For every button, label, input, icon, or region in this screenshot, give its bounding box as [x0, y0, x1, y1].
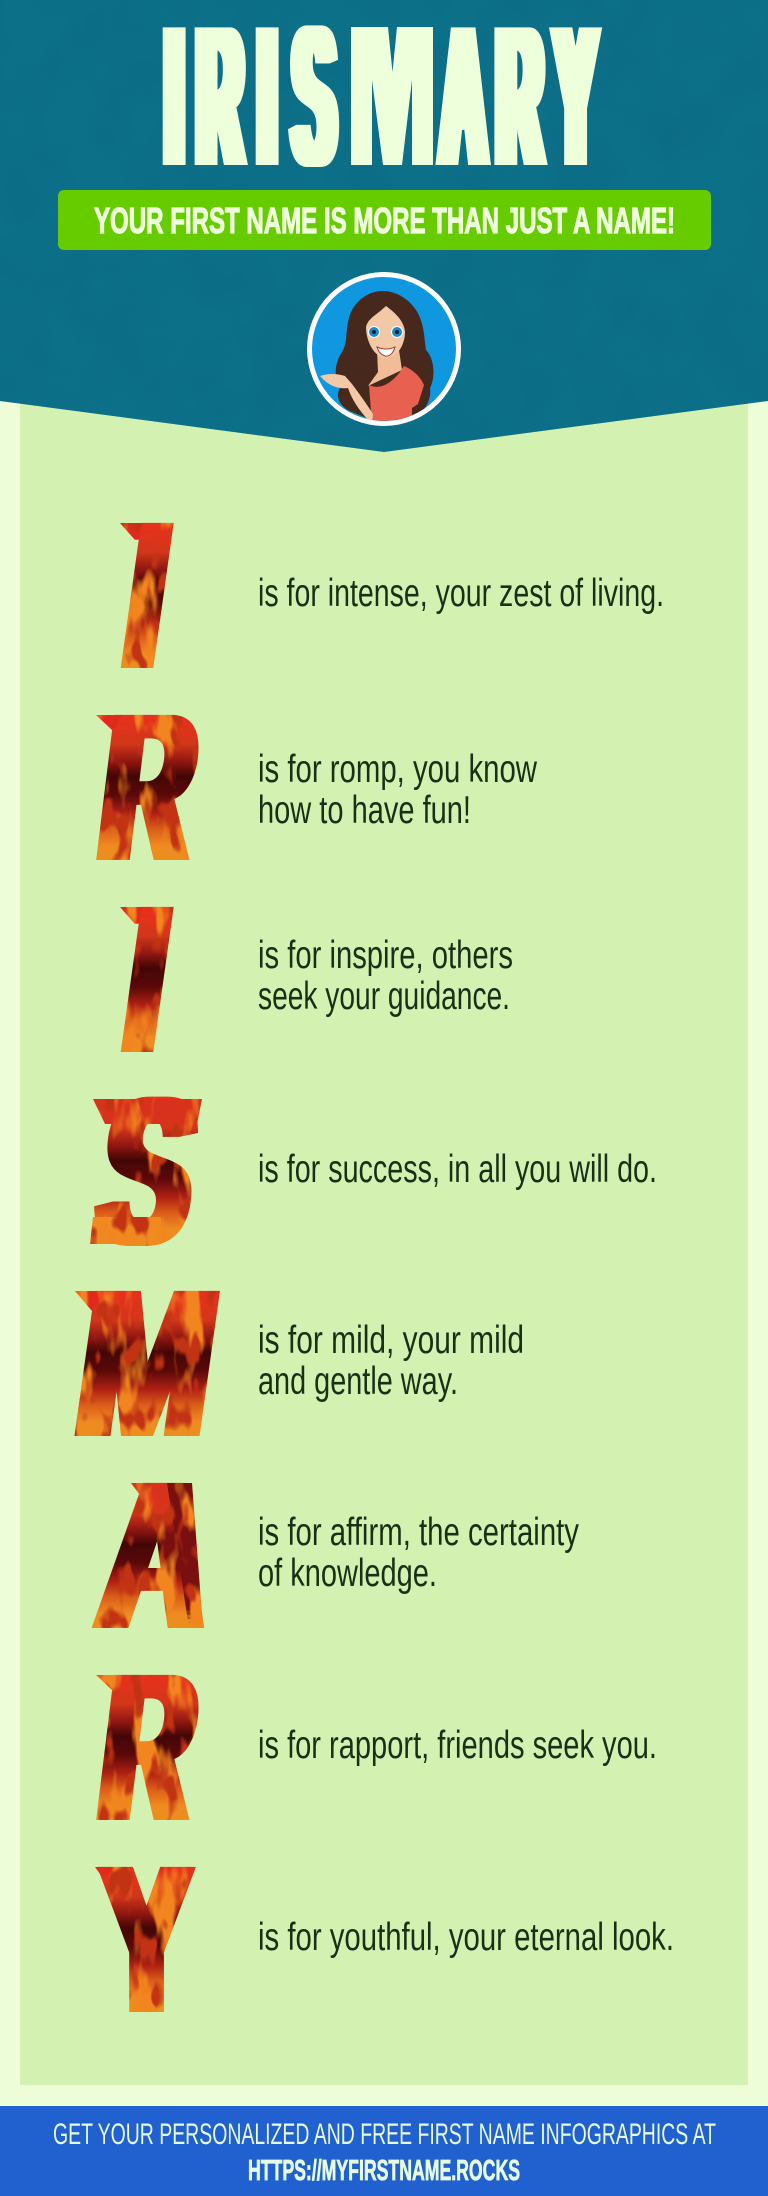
fire letter I: I: [115, 861, 180, 1097]
fire letter Y: [103, 1821, 190, 2057]
subtitle bar: [58, 190, 711, 250]
avatar: woman in circle: [307, 272, 461, 426]
row 2: letter R: [90, 669, 538, 905]
fire letter S: S: [87, 1053, 209, 1289]
fire letter I: I: [115, 477, 180, 713]
fire letter R: R: [90, 1629, 207, 1865]
text: and gentle way.: [258, 1360, 458, 1403]
fire letter M: M: [66, 1245, 229, 1481]
text: seek your guidance.: [258, 975, 510, 1018]
text: is for romp, you know: [258, 748, 538, 791]
fire letter A: A: [91, 1437, 220, 1673]
fire letter R: R: [90, 669, 207, 905]
text: is for affirm, the certainty: [258, 1511, 579, 1554]
row 6: letter A: [91, 1437, 579, 1673]
footer: [0, 2106, 768, 2196]
row 1: letter I: [115, 477, 664, 713]
row 8: letter Y: [103, 1821, 674, 2057]
text: is for inspire, others: [258, 934, 513, 977]
row 4: letter S: [87, 1053, 657, 1289]
text: [258, 1319, 524, 1403]
row 5: letter M: [66, 1245, 524, 1481]
text: [258, 934, 513, 1018]
text: is for mild, your mild: [258, 1319, 524, 1362]
row 7: letter R: [90, 1629, 657, 1865]
text: [258, 748, 538, 832]
footer url: HTTPS://MYFIRSTNAME.ROCKS: [248, 2155, 520, 2187]
fire letter Y: Y: [103, 1821, 190, 2057]
fire letter R: [90, 669, 207, 905]
text: [258, 1511, 579, 1595]
fire letter R: [90, 1629, 207, 1865]
text: how to have fun!: [258, 789, 471, 832]
header banner: [0, 0, 768, 452]
row 3: letter I: [115, 861, 513, 1097]
content panel: [20, 380, 748, 2085]
text: of knowledge.: [258, 1552, 437, 1595]
